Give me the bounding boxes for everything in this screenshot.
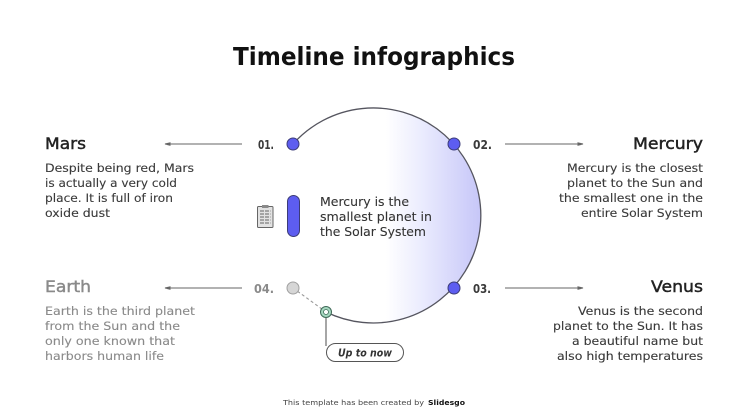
panel: Mercury — [559, 134, 704, 220]
title: Timeline infographics — [233, 42, 515, 71]
text: Earth description: only one known that — [45, 334, 176, 348]
text: Mars description: place. It is full of iron — [45, 191, 173, 205]
heading: Earth: Earth — [45, 277, 91, 296]
center text: smallest planet in — [320, 209, 432, 224]
text: Mercury description: entire Solar System — [581, 206, 703, 220]
center pill — [288, 196, 300, 236]
heading: Mercury: Mercury — [633, 134, 703, 153]
up to now callout — [326, 344, 404, 362]
footer credit: This template has been created by — [282, 399, 424, 407]
current position marker and connector — [320, 306, 332, 346]
center text: Mercury is the — [320, 194, 409, 209]
text: Venus description: planet to the Sun. It has — [553, 319, 703, 333]
text: Mercury description: Mercury is the closest — [567, 161, 704, 175]
heading: Venus: Venus — [651, 277, 703, 296]
text: Mars description: oxide dust — [45, 206, 111, 220]
text: Venus description: a beautiful name but — [572, 334, 704, 348]
icon: clipboard — [258, 205, 273, 228]
marker 04 — [287, 282, 299, 294]
text: Venus description: Venus is the second — [578, 304, 703, 318]
arrow: 01 to Mars — [165, 143, 242, 145]
arrow: 04 to Earth — [165, 287, 242, 289]
text: Earth description: from the Sun and the — [45, 319, 180, 333]
panel: Venus — [553, 277, 704, 363]
heading: Mars: Mars — [45, 134, 86, 153]
text: Mercury description: planet to the Sun and — [567, 176, 703, 190]
footer credit: Slidesgo — [428, 399, 465, 407]
center text — [320, 194, 432, 239]
number 04: 04. — [254, 281, 274, 296]
marker 02 — [448, 138, 460, 150]
text: Mars description: Despite being red, Mars — [45, 161, 194, 175]
text: Mars description: is actually a very cold — [45, 176, 177, 190]
footer credit — [282, 399, 465, 407]
text: Mars description — [45, 161, 194, 220]
text: Mercury description — [559, 161, 704, 220]
text: Earth description: harbors human life — [45, 349, 164, 363]
timeline circle — [266, 108, 481, 324]
text: Earth description: Earth is the third planet — [45, 304, 196, 318]
text: Mercury description: the smallest one in the — [559, 191, 703, 205]
text: Venus description: also high temperatures — [557, 349, 703, 363]
arrow: 03 to Venus — [505, 287, 583, 289]
up to now callout: Up to now — [338, 348, 392, 360]
number 01: 01. — [258, 137, 274, 152]
number 03: 03. — [473, 281, 491, 296]
marker 03 — [448, 282, 460, 294]
number 02: 02. — [473, 137, 492, 152]
center text: the Solar System — [320, 224, 426, 239]
arrow: 02 to Mercury — [505, 143, 583, 145]
text: Venus description — [553, 304, 704, 363]
marker 01 — [287, 138, 299, 150]
text: Earth description — [45, 304, 196, 363]
panel: Mars — [45, 134, 194, 220]
panel: Earth — [45, 277, 196, 363]
